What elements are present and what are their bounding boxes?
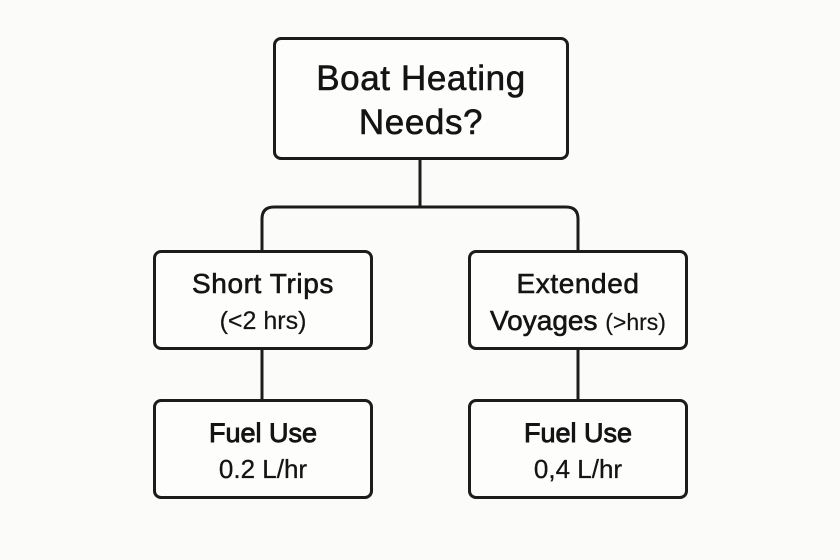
title box: Boat Heating Needs?: Needs? <box>359 103 483 142</box>
title box: Boat Heating Needs? <box>273 37 569 160</box>
box: Extended Voyages <box>468 250 688 350</box>
box: Fuel Use 0,4: Fuel Use <box>524 418 632 448</box>
box: Fuel Use 0.2 <box>153 399 373 499</box>
box: Extended Voyages: Voyages (>hrs) <box>490 305 666 336</box>
box: Short Trips <box>153 250 373 350</box>
title box: Boat Heating Needs?: Boat Heating <box>316 59 526 98</box>
box: Fuel Use 0.2: 0.2 L/hr <box>219 454 307 484</box>
box: Short Trips: (<2 hrs) <box>220 307 306 335</box>
box: Fuel Use 0,4 <box>468 399 688 499</box>
box: Fuel Use 0.2: Fuel Use <box>209 418 317 448</box>
box: Fuel Use 0,4: 0,4 L/hr <box>534 454 622 484</box>
box: Extended Voyages: Extended <box>516 268 640 299</box>
box: Short Trips: Short Trips <box>192 268 334 299</box>
